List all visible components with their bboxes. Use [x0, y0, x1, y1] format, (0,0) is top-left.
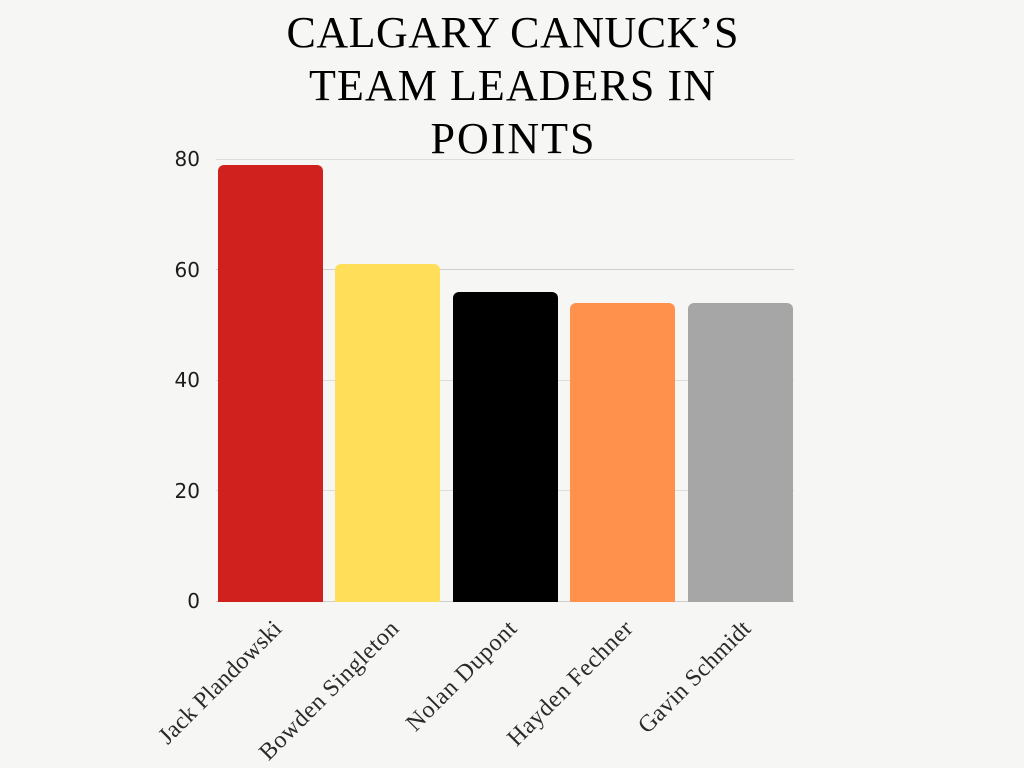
title: TEAM LEADERS IN [309, 61, 715, 110]
x axis labels: Bowden Singleton [254, 616, 404, 766]
y axis labels: 60 [175, 258, 200, 282]
bar: Jack Plandowski [218, 165, 323, 602]
title [286, 8, 738, 163]
bar: Gavin Schmidt [688, 303, 793, 602]
y axis labels [175, 147, 200, 613]
x axis labels: Jack Plandowski [154, 616, 287, 750]
y axis labels: 0 [187, 589, 200, 613]
y axis labels: 40 [175, 368, 200, 392]
y axis labels: 20 [175, 479, 200, 503]
x axis labels: Nolan Dupont [401, 616, 522, 737]
x axis labels: Gavin Schmidt [633, 616, 756, 739]
bar: Bowden Singleton [335, 264, 440, 602]
y axis labels: 80 [175, 147, 200, 171]
bar: Hayden Fechner [570, 303, 675, 602]
title: POINTS [430, 114, 594, 163]
x axis labels [154, 616, 756, 766]
bar: Nolan Dupont [453, 292, 558, 602]
title: CALGARY CANUCK’S [286, 8, 738, 57]
x axis labels: Hayden Fechner [502, 616, 638, 752]
bar chart [218, 165, 793, 602]
